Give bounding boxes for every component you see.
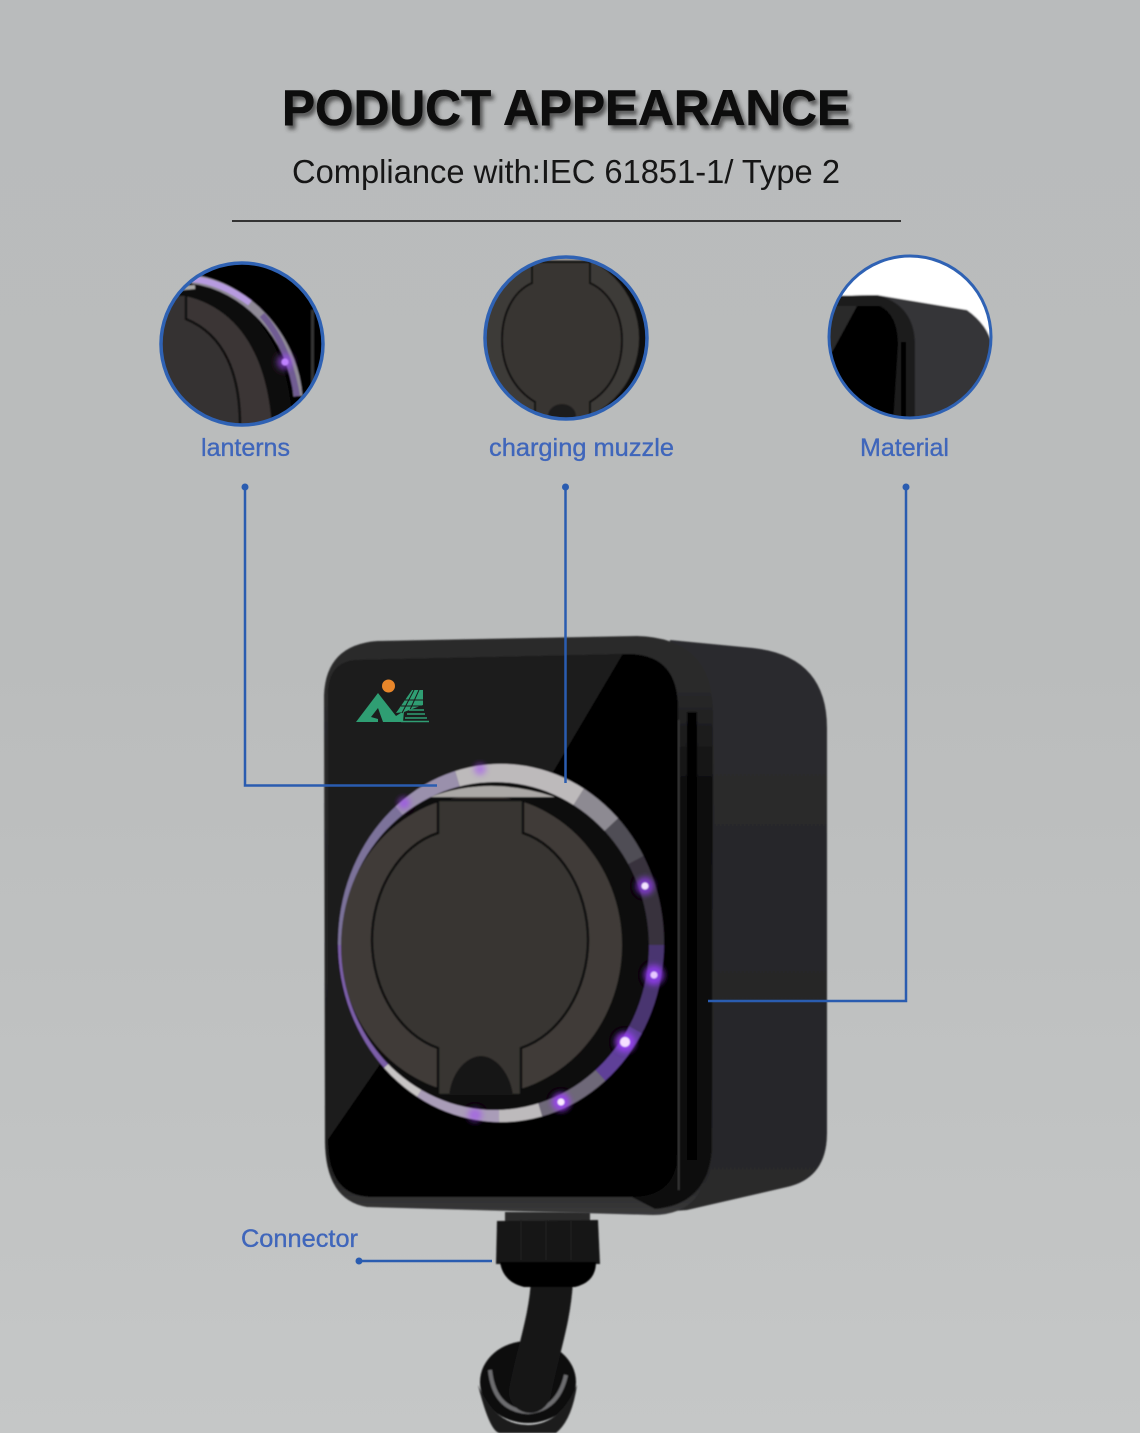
cable and gland <box>478 1212 600 1433</box>
front frame <box>324 636 713 1215</box>
callout line: material <box>708 484 910 1001</box>
wallbox device <box>320 636 827 1215</box>
glass panel <box>320 640 690 1210</box>
callout line: connector <box>356 1258 492 1264</box>
socket cap <box>372 800 588 1095</box>
latch notch <box>449 1056 513 1095</box>
detail circle: material <box>828 254 992 420</box>
detail circle: charging muzzle <box>483 255 649 421</box>
socket plate <box>340 795 622 1095</box>
label: charging muzzle: charging muzzle <box>489 434 674 462</box>
detail circle: lanterns <box>159 261 325 427</box>
frame slit <box>678 712 697 1190</box>
header rule <box>232 220 901 222</box>
cable loop <box>478 1341 577 1433</box>
label: connector: Connector <box>241 1225 358 1253</box>
cable <box>530 1280 552 1392</box>
title: PODUCT APPEARANCE <box>282 80 850 136</box>
frame right band <box>632 690 713 1209</box>
label: lanterns: lanterns <box>201 434 290 462</box>
callout line: lanterns <box>242 484 437 786</box>
LED glows <box>398 763 664 1122</box>
subtitle: Compliance with:IEC 61851-1/ Type 2 <box>292 153 840 190</box>
logo <box>356 680 429 722</box>
cable nut <box>496 1212 600 1287</box>
callout line: charging muzzle <box>562 484 569 783</box>
black inner disc <box>337 773 657 1117</box>
LED ring <box>338 764 664 1122</box>
side body <box>660 640 827 1212</box>
label: material: Material <box>860 434 949 462</box>
light wedge <box>430 786 555 797</box>
